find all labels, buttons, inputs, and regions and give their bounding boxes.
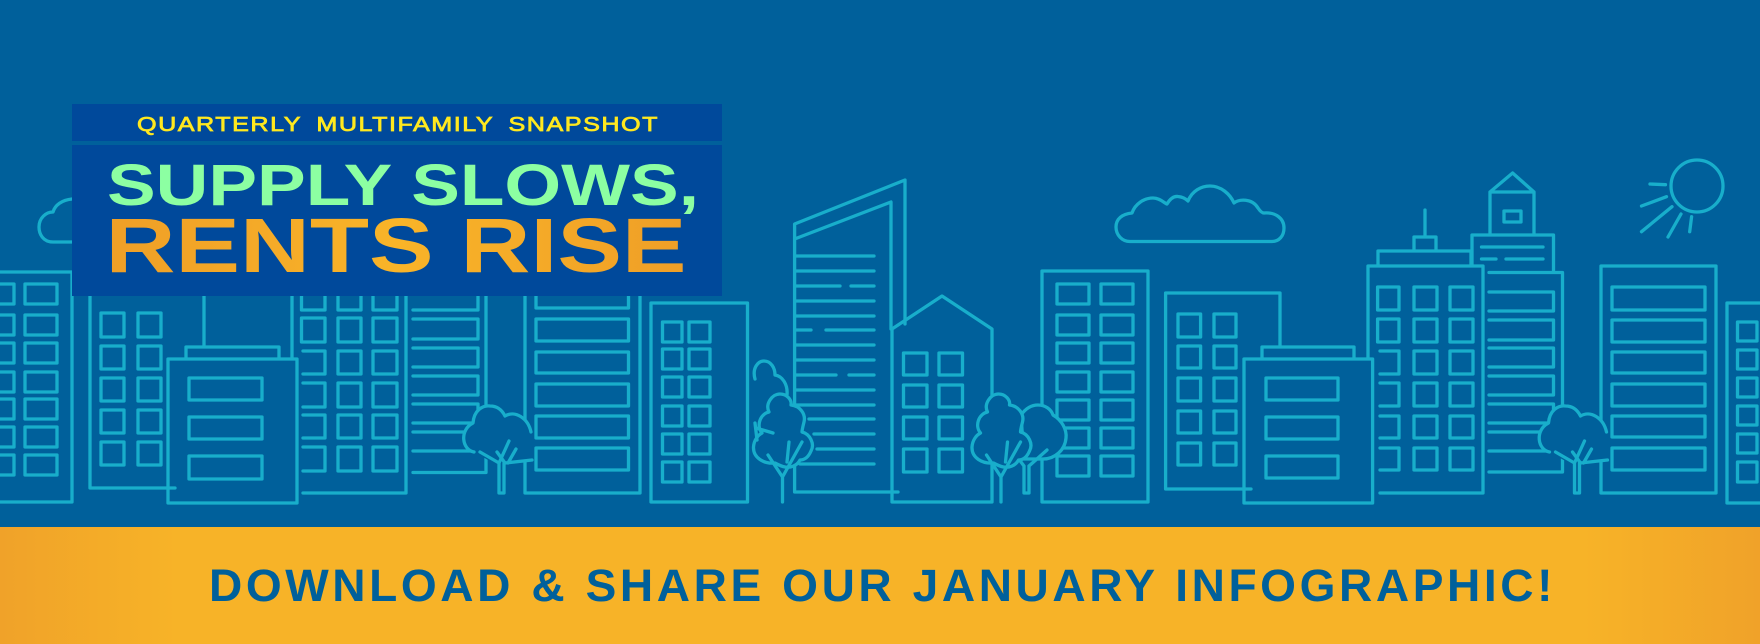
tree: left bbox=[464, 406, 533, 493]
subtitle text: QUARTERLY MULTIFAMILY SNAPSHOT bbox=[137, 114, 659, 136]
building: two-column tall bbox=[1042, 271, 1148, 502]
panel: download banner bbox=[0, 527, 1760, 644]
building: back left two-column bbox=[90, 290, 204, 488]
building: far left bbox=[0, 272, 72, 502]
building: house-roof bbox=[892, 296, 992, 502]
building: wide windows bbox=[525, 290, 640, 493]
building: slanted tower bbox=[795, 180, 905, 492]
cloud: left bbox=[39, 199, 80, 242]
icon: sun bbox=[1642, 160, 1723, 237]
cityscape illustration bbox=[0, 160, 1760, 503]
building: three-column bbox=[292, 290, 406, 493]
title band bbox=[72, 145, 722, 296]
tree: center right front bbox=[972, 394, 1031, 502]
title line 1: SUPPLY SLOWS, bbox=[107, 153, 699, 218]
building: wide windows right bbox=[1601, 266, 1716, 493]
banner background bbox=[0, 527, 1760, 644]
building: six-row mid bbox=[651, 303, 748, 502]
title line 2: RENTS RISE bbox=[106, 203, 686, 289]
tree: right bbox=[1539, 406, 1608, 493]
building: tower with peaked top bbox=[1472, 173, 1562, 472]
building: three-column with antenna bbox=[1368, 210, 1483, 493]
panel: title box bbox=[72, 104, 722, 296]
banner text: DOWNLOAD & SHARE OUR JANUARY INFOGRAPHIC! bbox=[209, 560, 1556, 611]
tree: center right back bbox=[1015, 405, 1066, 493]
building: low front right bbox=[1244, 347, 1373, 503]
tree: small behind bbox=[754, 361, 787, 395]
cloud: center bbox=[1116, 186, 1284, 242]
subtitle band bbox=[72, 104, 722, 141]
building: two-column right low bbox=[1166, 293, 1280, 489]
building: stepped lines behind bbox=[413, 290, 486, 472]
building: far right bbox=[1727, 303, 1760, 503]
tree: center left bbox=[753, 394, 812, 502]
building: low front bbox=[168, 347, 297, 503]
